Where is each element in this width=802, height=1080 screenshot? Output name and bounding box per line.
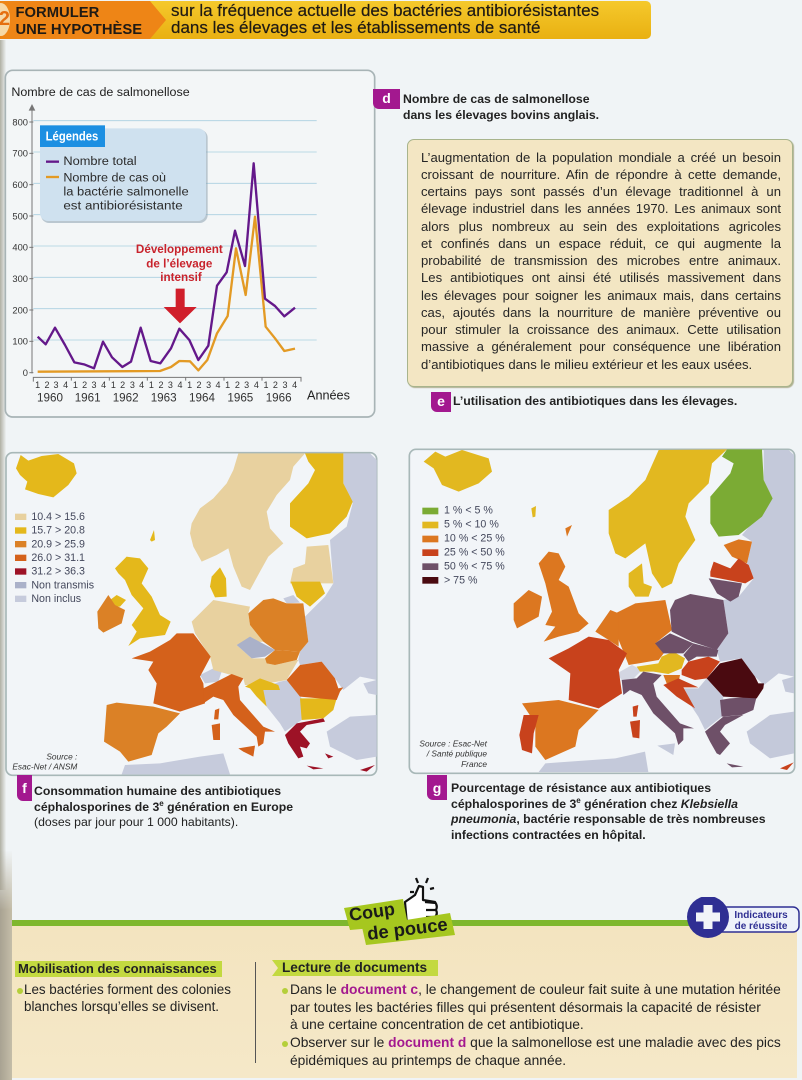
annotation: intensive farming: Développement xyxy=(136,243,223,256)
x axis year labels: 1960 xyxy=(37,392,63,405)
caption d text: Nombre de cas de salmonellose xyxy=(403,92,590,106)
x axis quarter labels: 2 xyxy=(82,380,87,390)
panel: coup de pouce xyxy=(12,925,797,1078)
text box e: d’antibiotiques dans le milieu extérieur et les eaux usées. xyxy=(421,356,752,372)
mobilisation text xyxy=(17,982,231,1014)
x axis year labels: 1965 xyxy=(227,392,253,405)
step number xyxy=(0,3,10,36)
header label: UNE HYPOTHÈSE xyxy=(16,22,142,38)
x axis year labels: 1966 xyxy=(266,392,292,405)
badge: coup de pouce xyxy=(344,878,455,945)
dark orange countries xyxy=(132,633,343,757)
header: orange arrow tab xyxy=(0,1,166,39)
tag g: g xyxy=(433,780,441,796)
documents text: à une certaine concentration de cet antibiotique. xyxy=(290,1017,584,1032)
x axis quarter labels: 2 xyxy=(273,380,278,390)
legend: Nombre de cas où xyxy=(63,170,166,184)
map legend: 50 % < 75 % xyxy=(444,560,505,572)
map legend: 25 % < 50 % xyxy=(444,547,505,559)
caption f text: céphalosporines de 3e génération en Europe xyxy=(34,799,293,814)
badge text xyxy=(734,910,788,932)
caption f text: (doses par jour pour 1 000 habitants). xyxy=(34,815,238,829)
orange countries xyxy=(97,595,308,762)
x axis quarter labels: 4 xyxy=(177,380,183,390)
x axis quarter labels: 2 xyxy=(44,380,50,390)
header banner xyxy=(0,1,651,39)
x axis quarter labels: 2 xyxy=(235,380,240,390)
y axis labels: 700 xyxy=(12,149,28,159)
x axis quarter labels: 3 xyxy=(130,380,135,390)
documents text: Observer sur le document d que la salmonellose est une maladie avec des pics xyxy=(290,1035,781,1050)
non-included territories xyxy=(122,453,377,774)
vertical divider xyxy=(255,962,256,1063)
map legend: 10.4 > 15.6 xyxy=(31,511,85,523)
y axis labels: 500 xyxy=(12,211,28,221)
caption f text: Consommation humaine des antibiotiques xyxy=(34,784,281,798)
text box e: et confinés dans un espace réduit, ce qui augmente la xyxy=(421,236,781,251)
tag d xyxy=(373,89,400,109)
x axis quarter labels: 4 xyxy=(101,380,106,390)
y axis labels: 400 xyxy=(12,243,28,253)
panel: map f, consumption xyxy=(5,452,378,776)
yellow countries xyxy=(110,453,353,720)
panel: salmonellosis line chart xyxy=(4,70,376,418)
x axis quarter labels: 2 xyxy=(120,380,125,390)
panel: map g, resistance xyxy=(408,448,796,774)
x axis quarter labels: 1 xyxy=(149,380,154,390)
x axis quarter labels: 1 xyxy=(73,380,78,390)
mobilisation text: blanches lorsqu’elles se divisent. xyxy=(24,999,219,1014)
badge text: de réussite xyxy=(735,921,788,932)
caption d text: dans les élevages bovins anglais. xyxy=(403,108,599,122)
documents text: épidémiques au printemps de chaque année. xyxy=(290,1053,566,1068)
map legend: 5 % < 10 % xyxy=(444,519,499,531)
line: resistant cases xyxy=(38,217,295,372)
map legend: Non inclus xyxy=(31,593,81,605)
text box e: pour stimuler la croissance des animaux. Cette utilisation xyxy=(421,322,781,337)
documents text: par toutes les bactéries filles qui présentent désormais la capacité de résister xyxy=(290,1000,761,1015)
caption f text xyxy=(34,784,293,829)
arrow: intensive farming xyxy=(164,289,197,323)
legend: est antibiorésistante xyxy=(63,199,183,213)
y axis labels: 600 xyxy=(12,180,28,190)
x axis quarter labels: 1 xyxy=(225,380,230,390)
map source: Source : Esac-Net xyxy=(419,738,488,748)
tag f xyxy=(17,775,32,801)
header label xyxy=(16,4,142,38)
tag d: d xyxy=(382,90,391,106)
caption f xyxy=(17,775,293,829)
documents text xyxy=(282,982,781,1068)
icon: thumbs up xyxy=(405,878,437,925)
annotation: intensive farming: de l’élevage xyxy=(146,257,213,270)
section title: documents: Lecture de documents xyxy=(282,960,427,975)
green rule xyxy=(12,920,702,926)
yellow countries xyxy=(531,449,727,674)
x axis quarter labels: 2 xyxy=(196,380,202,390)
x axis year labels: 1963 xyxy=(151,392,177,405)
x axis xyxy=(33,377,301,382)
legend: Nombre total xyxy=(63,154,137,168)
header text: dans les élevages et les établissements de santé xyxy=(171,18,541,37)
x axis year labels: 1962 xyxy=(113,392,139,405)
x axis quarter labels: 4 xyxy=(215,380,221,390)
map source: / Santé publique xyxy=(426,749,487,759)
map source xyxy=(419,738,488,769)
legend: Légendes xyxy=(46,129,98,143)
map legend: > 75 % xyxy=(444,574,478,586)
text box e: élevage industriel dans les années 1970. Les animaux sont xyxy=(421,201,781,216)
x axis year labels: 1964 xyxy=(189,392,215,405)
annotation: intensive farming: intensif xyxy=(160,271,202,284)
map source: Source : xyxy=(46,751,77,761)
tag g xyxy=(427,775,447,800)
beige countries xyxy=(190,453,333,685)
x axis quarter labels: 3 xyxy=(91,380,97,390)
caption g text: céphalosporines de 3e génération chez Klebsiella xyxy=(451,796,738,811)
legend xyxy=(40,125,208,223)
caption g text xyxy=(450,781,766,842)
x axis quarter labels: 2 xyxy=(158,380,164,390)
tag e xyxy=(431,392,451,412)
text box e: alors plus nombreux au sein des exploitations agricoles xyxy=(421,218,781,234)
label: de pouce: de pouce xyxy=(366,913,449,944)
annotation: intensive farming xyxy=(136,243,223,284)
map legend: 20.9 > 25.9 xyxy=(31,538,85,550)
caption d text xyxy=(403,92,599,122)
section title: mobilisation: Mobilisation des connaissances xyxy=(18,961,217,976)
grid lines xyxy=(33,121,317,340)
map legend: 26.0 > 31.1 xyxy=(31,552,85,564)
Romania xyxy=(707,658,764,698)
line: total cases xyxy=(38,163,295,368)
map legend: 10 % < 25 % xyxy=(444,533,505,545)
badge: success indicators xyxy=(687,897,800,938)
x axis quarter labels: 4 xyxy=(63,380,68,390)
header: yellow band xyxy=(0,1,651,39)
Greece xyxy=(285,718,375,772)
text box e: probabilité de transmission des microbes entre animaux. xyxy=(421,253,781,268)
text box e: certains pays sont passés d’un élevage traditionnel à un xyxy=(421,184,781,199)
orange countries xyxy=(514,525,752,760)
caption d xyxy=(373,89,599,122)
text box e: L’augmentation de la population mondiale a créé un besoin xyxy=(421,150,781,164)
map legend: 15.7 > 20.8 xyxy=(31,525,85,537)
map legend: 1 % < 5 % xyxy=(444,505,493,517)
caption g text: infections contractées en hôpital. xyxy=(451,828,646,842)
documents text: Dans le document c, le changement de couleur fait suite à une mutation héritée xyxy=(290,982,781,997)
purple countries xyxy=(622,578,757,767)
y axis labels: 100 xyxy=(12,337,28,347)
x axis quarter labels: 3 xyxy=(168,380,173,390)
caption g xyxy=(427,775,766,842)
caption g text: Pourcentage de résistance aux antibiotiques xyxy=(451,781,711,795)
map legend xyxy=(422,505,505,586)
page edge shadow xyxy=(0,40,6,890)
caption g text: pneumonia, bactérie responsable de très nombreuses xyxy=(451,812,766,826)
y axis labels: 800 xyxy=(12,117,28,127)
map legend: 31.2 > 36.3 xyxy=(31,566,85,578)
y axis labels xyxy=(12,117,28,378)
header text xyxy=(171,1,599,37)
x axis quarter labels: 4 xyxy=(139,380,144,390)
label: coup: Coup xyxy=(348,899,396,925)
map legend: Non transmis xyxy=(31,579,94,591)
text box e: massive a généralement pour conséquence une libération xyxy=(421,339,781,354)
y axis xyxy=(29,104,35,373)
badge text: Indicateurs xyxy=(734,910,788,921)
icon: plus xyxy=(687,896,729,938)
non-included territories xyxy=(539,450,794,772)
Finland xyxy=(710,449,773,537)
caption e text: L’utilisation des antibiotiques dans les élevages. xyxy=(453,394,737,408)
map source: France xyxy=(461,759,487,769)
map legend xyxy=(15,511,94,605)
text box e: cas, ajoutés dans la nourriture de manière préventive ou xyxy=(421,305,781,320)
x axis quarter labels: 4 xyxy=(292,380,297,390)
tag f: f xyxy=(22,780,27,796)
Iceland xyxy=(424,450,492,492)
text box e xyxy=(407,139,793,387)
legend: la bactérie salmonelle xyxy=(63,185,189,199)
x axis quarter labels: 3 xyxy=(53,380,59,390)
y axis labels: 0 xyxy=(23,368,28,378)
x axis quarter labels: 1 xyxy=(111,380,116,390)
caption e xyxy=(431,392,737,412)
Czechia, not transmitted xyxy=(237,637,275,658)
mobilisation text: Les bactéries forment des colonies xyxy=(24,982,231,997)
x axis year labels xyxy=(37,392,292,405)
map source: Esac-Net / ANSM xyxy=(12,762,77,772)
lower page edge shadow xyxy=(0,850,12,1080)
x axis quarter labels: 1 xyxy=(187,380,192,390)
text box e: croissant de nourriture. Afin de répondre à cette demande, xyxy=(421,167,781,182)
text box e: les élevages pour soigner les animaux mais, dans certains xyxy=(421,288,781,302)
x axis quarter labels: 3 xyxy=(282,380,288,390)
x axis quarter labels xyxy=(35,380,297,390)
text box e: Les antibiotiques ont ainsi été utilisés massivement dans xyxy=(421,270,781,285)
y axis labels: 300 xyxy=(12,274,28,284)
Iceland xyxy=(16,454,77,497)
x axis quarter labels: 4 xyxy=(254,380,259,390)
red countries xyxy=(519,558,794,770)
x axis quarter labels: 3 xyxy=(244,380,249,390)
x axis quarter labels: 1 xyxy=(263,380,269,390)
header text: sur la fréquence actuelle des bactéries antibiorésistantes xyxy=(171,1,599,20)
x axis quarter labels: 1 xyxy=(35,380,40,390)
header label: FORMULER xyxy=(16,4,99,20)
map source xyxy=(12,751,77,772)
y axis labels: 200 xyxy=(12,305,28,315)
tag e: e xyxy=(437,393,445,409)
x axis year labels: 1961 xyxy=(75,392,101,405)
x axis quarter labels: 3 xyxy=(206,380,211,390)
x axis title: Années xyxy=(307,389,350,403)
chart y axis title: Nombre de cas de salmonellose xyxy=(11,85,190,99)
